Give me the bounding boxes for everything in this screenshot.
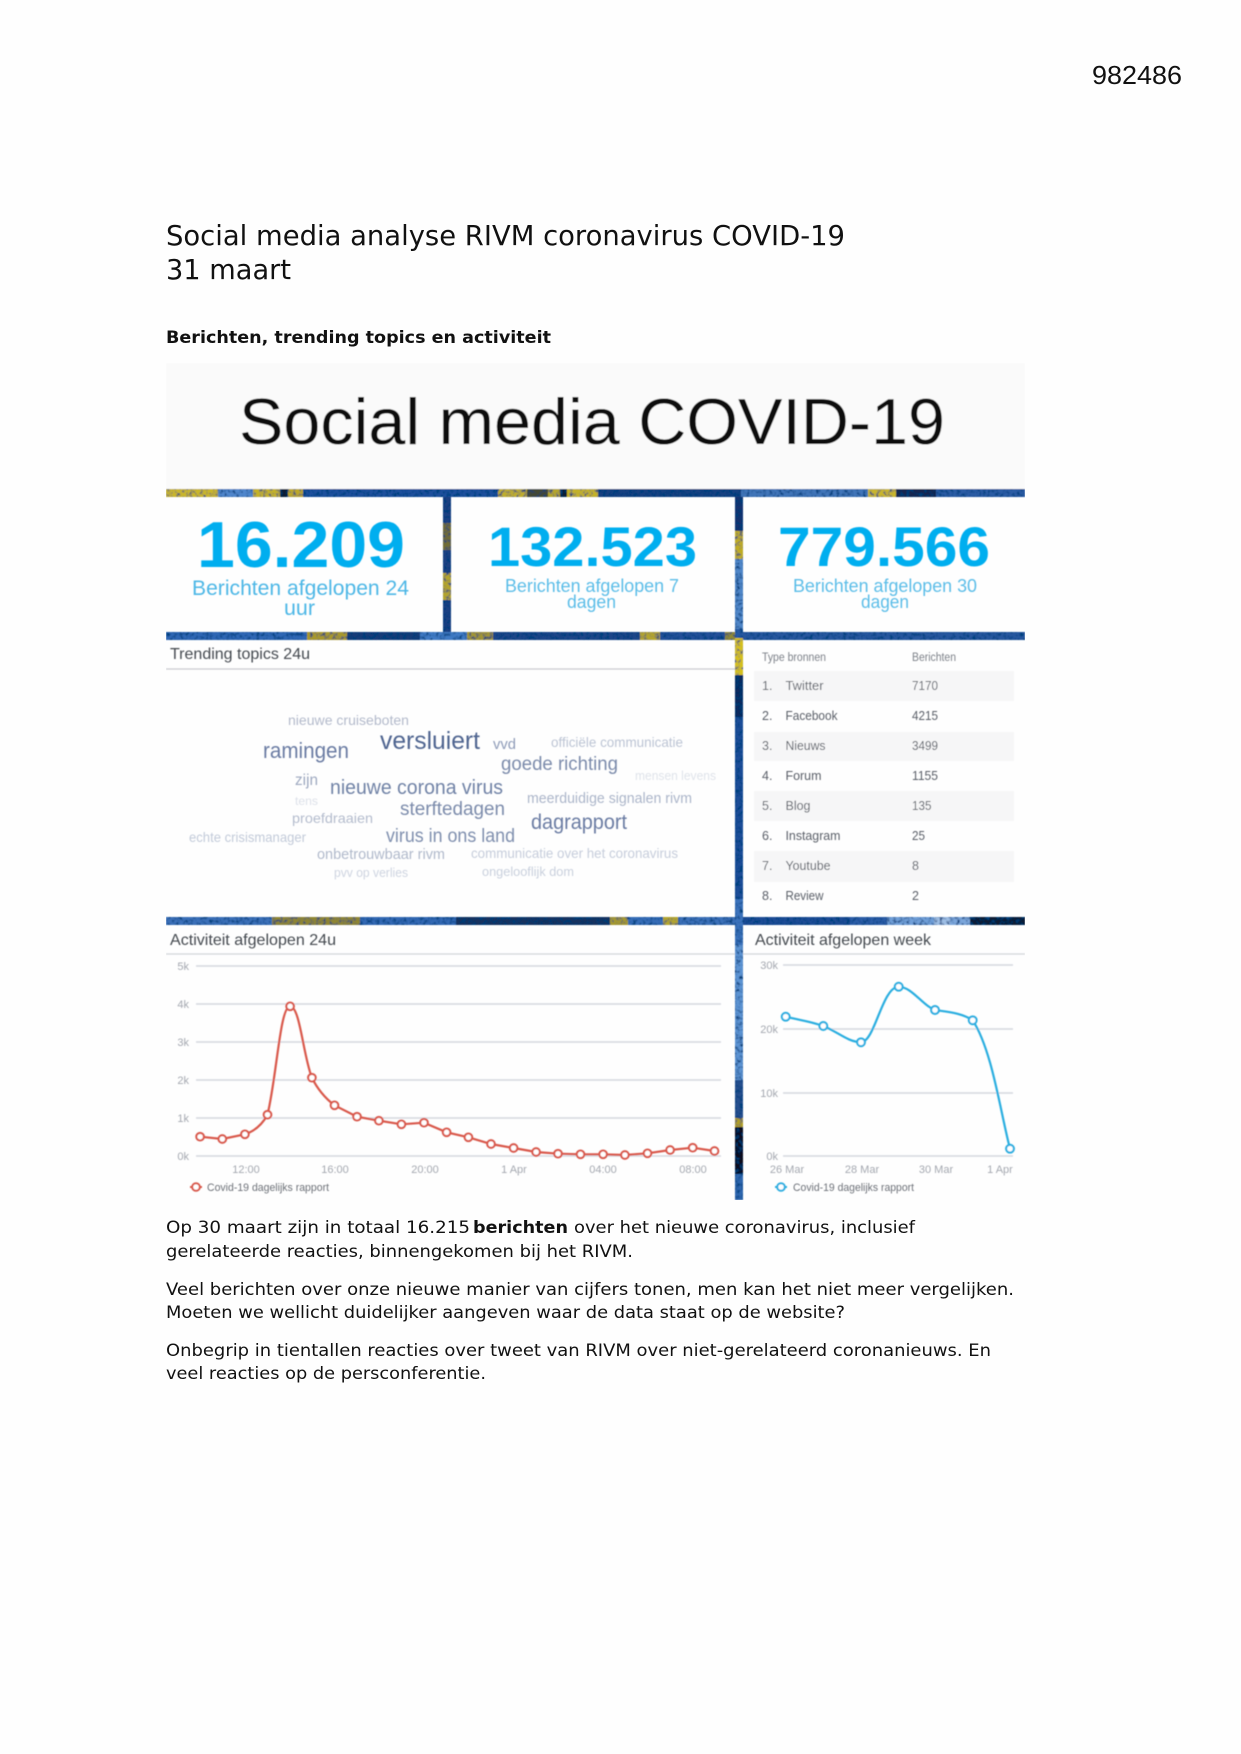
panel: source table: Blog <box>786 799 811 813</box>
chart: activiteit afgelopen 24u: Activiteit afgelopen 24u <box>170 932 336 949</box>
stat card: 30 dagen: dagen <box>861 592 909 612</box>
panel: source table <box>754 652 1014 903</box>
word cloud: dagrapport <box>531 811 627 834</box>
panel: source table: Facebook <box>786 709 838 723</box>
body text: berichten <box>473 1218 568 1237</box>
word cloud: mensen levens <box>635 768 716 783</box>
document title <box>166 219 845 286</box>
chart: activiteit afgelopen 24u: 4k <box>177 999 189 1011</box>
chart: activiteit afgelopen week: Activiteit afgelopen week <box>755 932 932 949</box>
panel: source table: 7. <box>762 859 772 873</box>
panel: source table: 2 <box>912 889 919 903</box>
word cloud: sterftedagen <box>400 799 505 820</box>
panel: source table: 135 <box>912 799 932 813</box>
panel: trending topics: Trending topics 24u <box>170 646 310 663</box>
stat card: 30 dagen <box>778 515 990 612</box>
word cloud <box>189 712 716 880</box>
word cloud: nieuwe corona virus <box>330 777 503 799</box>
chart: activiteit afgelopen week <box>743 932 1025 1194</box>
chart: activiteit afgelopen week: 1 Apr <box>987 1164 1013 1176</box>
stat card: 30 dagen: 779.566 <box>778 515 990 578</box>
chart: activiteit afgelopen week: 0k <box>766 1151 778 1163</box>
chart: activiteit afgelopen 24u: 0k <box>177 1151 189 1163</box>
stat card: 7 dagen: Berichten afgelopen 7 <box>505 576 679 596</box>
word cloud: vvd <box>493 736 516 753</box>
panel: source table: Review <box>786 889 824 903</box>
section heading: Berichten, trending topics en activiteit <box>166 328 551 348</box>
panel: source table: 7170 <box>912 679 938 693</box>
virus texture bands <box>166 489 1025 1200</box>
chart: activiteit afgelopen 24u: 04:00 <box>589 1164 617 1176</box>
stat card: 24 uur <box>192 508 409 620</box>
document title: Social media analyse RIVM coronavirus COVID-19 <box>166 219 845 252</box>
chart: activiteit afgelopen 24u <box>166 932 735 1194</box>
chart: activiteit afgelopen week: 30 Mar <box>919 1164 953 1176</box>
stat card: 24 uur: 16.209 <box>197 508 405 581</box>
chart: activiteit afgelopen 24u: 16:00 <box>321 1164 349 1176</box>
legend: red series: Covid-19 dagelijks rapport <box>207 1182 329 1194</box>
panel: source table: Berichten <box>912 652 956 664</box>
word cloud: ramingen <box>263 738 349 763</box>
stat card: 7 dagen <box>488 515 697 612</box>
dashboard banner: Social media COVID-19 <box>239 385 945 458</box>
chart: activiteit afgelopen 24u: 1 Apr <box>501 1164 527 1176</box>
chart: activiteit afgelopen week: 30k <box>760 960 778 972</box>
stat card: 30 dagen: Berichten afgelopen 30 <box>793 576 977 596</box>
stat card: 7 dagen: 132.523 <box>488 515 697 578</box>
chart: activiteit afgelopen 24u: 2k <box>177 1075 189 1087</box>
body text <box>166 1218 1014 1383</box>
panel: source table: 8 <box>912 859 919 873</box>
word cloud: ongelooflijk dom <box>482 864 574 879</box>
panel: source table: 4. <box>762 769 772 783</box>
word cloud: goede richting <box>501 754 618 775</box>
panel: source table: Forum <box>786 769 822 783</box>
word cloud: versluiert <box>380 727 480 755</box>
panel: source table: 4215 <box>912 709 938 723</box>
body text: gerelateerde reacties, binnengekomen bij het RIVM. <box>166 1242 633 1261</box>
panel: source table: 6. <box>762 829 772 843</box>
dashboard <box>166 363 1025 1200</box>
panel: source table: 8. <box>762 889 772 903</box>
panel: source table: Youtube <box>786 859 831 873</box>
word cloud: nieuwe cruiseboten <box>288 712 409 728</box>
chart: activiteit afgelopen 24u: 3k <box>177 1037 189 1049</box>
chart: activiteit afgelopen week: 20k <box>760 1024 778 1036</box>
panel: source table: 1. <box>762 679 772 693</box>
panel: source table: Nieuws <box>786 739 826 753</box>
body text: over het nieuwe coronavirus, inclusief <box>574 1218 916 1237</box>
chart: activiteit afgelopen 24u: 1k <box>177 1113 189 1125</box>
panel: source table: 5. <box>762 799 772 813</box>
word cloud: pvv op verlies <box>334 865 408 880</box>
panel: source table: 1155 <box>912 769 938 783</box>
chart: activiteit afgelopen 24u: 12:00 <box>232 1164 260 1176</box>
chart: activiteit afgelopen week: 28 Mar <box>845 1164 879 1176</box>
word cloud: officiële communicatie <box>551 734 683 750</box>
word cloud: meerduidige signalen rivm <box>527 790 692 807</box>
panel: source table: Instagram <box>786 829 840 843</box>
dashboard banner <box>166 363 1025 489</box>
panel: trending topics <box>166 646 735 880</box>
body text: Veel berichten over onze nieuwe manier van cijfers tonen, men kan het niet meer vergelijken. <box>166 1280 1014 1299</box>
body text: Onbegrip in tientallen reacties over tweet van RIVM over niet-gerelateerd coronanieuws. En <box>166 1341 991 1360</box>
panel: source table: 3. <box>762 739 772 753</box>
stat card: 24 uur: uur <box>284 597 315 620</box>
panel: source table: 3499 <box>912 739 938 753</box>
word cloud: onbetrouwbaar rivm <box>317 846 445 863</box>
word cloud: proefdraaien <box>292 810 373 826</box>
body text: Op 30 maart zijn in totaal 16.215 <box>166 1218 470 1237</box>
document number: 982486 <box>1092 60 1182 90</box>
word cloud: communicatie over het coronavirus <box>471 845 678 861</box>
chart: activiteit afgelopen 24u: 08:00 <box>679 1164 707 1176</box>
chart: activiteit afgelopen week: 26 Mar <box>770 1164 804 1176</box>
chart: activiteit afgelopen 24u: 5k <box>177 961 189 973</box>
panel: source table: Type bronnen <box>762 652 826 664</box>
stat card: 7 dagen: dagen <box>567 592 616 612</box>
legend: blue series: Covid-19 dagelijks rapport <box>793 1182 914 1194</box>
word cloud: virus in ons land <box>386 826 515 847</box>
word cloud: zijn <box>295 772 318 789</box>
document title: 31 maart <box>166 253 291 286</box>
panel: source table: 2. <box>762 709 772 723</box>
panel: source table: Twitter <box>786 679 824 693</box>
panel: source table: 25 <box>912 829 925 843</box>
chart: activiteit afgelopen 24u: 20:00 <box>411 1164 439 1176</box>
body text: veel reacties op de persconferentie. <box>166 1364 486 1383</box>
stat card: 24 uur: Berichten afgelopen 24 <box>192 577 409 600</box>
word cloud: echte crisismanager <box>189 829 306 845</box>
chart: activiteit afgelopen week: 10k <box>760 1088 778 1100</box>
word cloud: tens <box>295 794 318 808</box>
body text: Moeten we wellicht duidelijker aangeven waar de data staat op de website? <box>166 1303 845 1322</box>
